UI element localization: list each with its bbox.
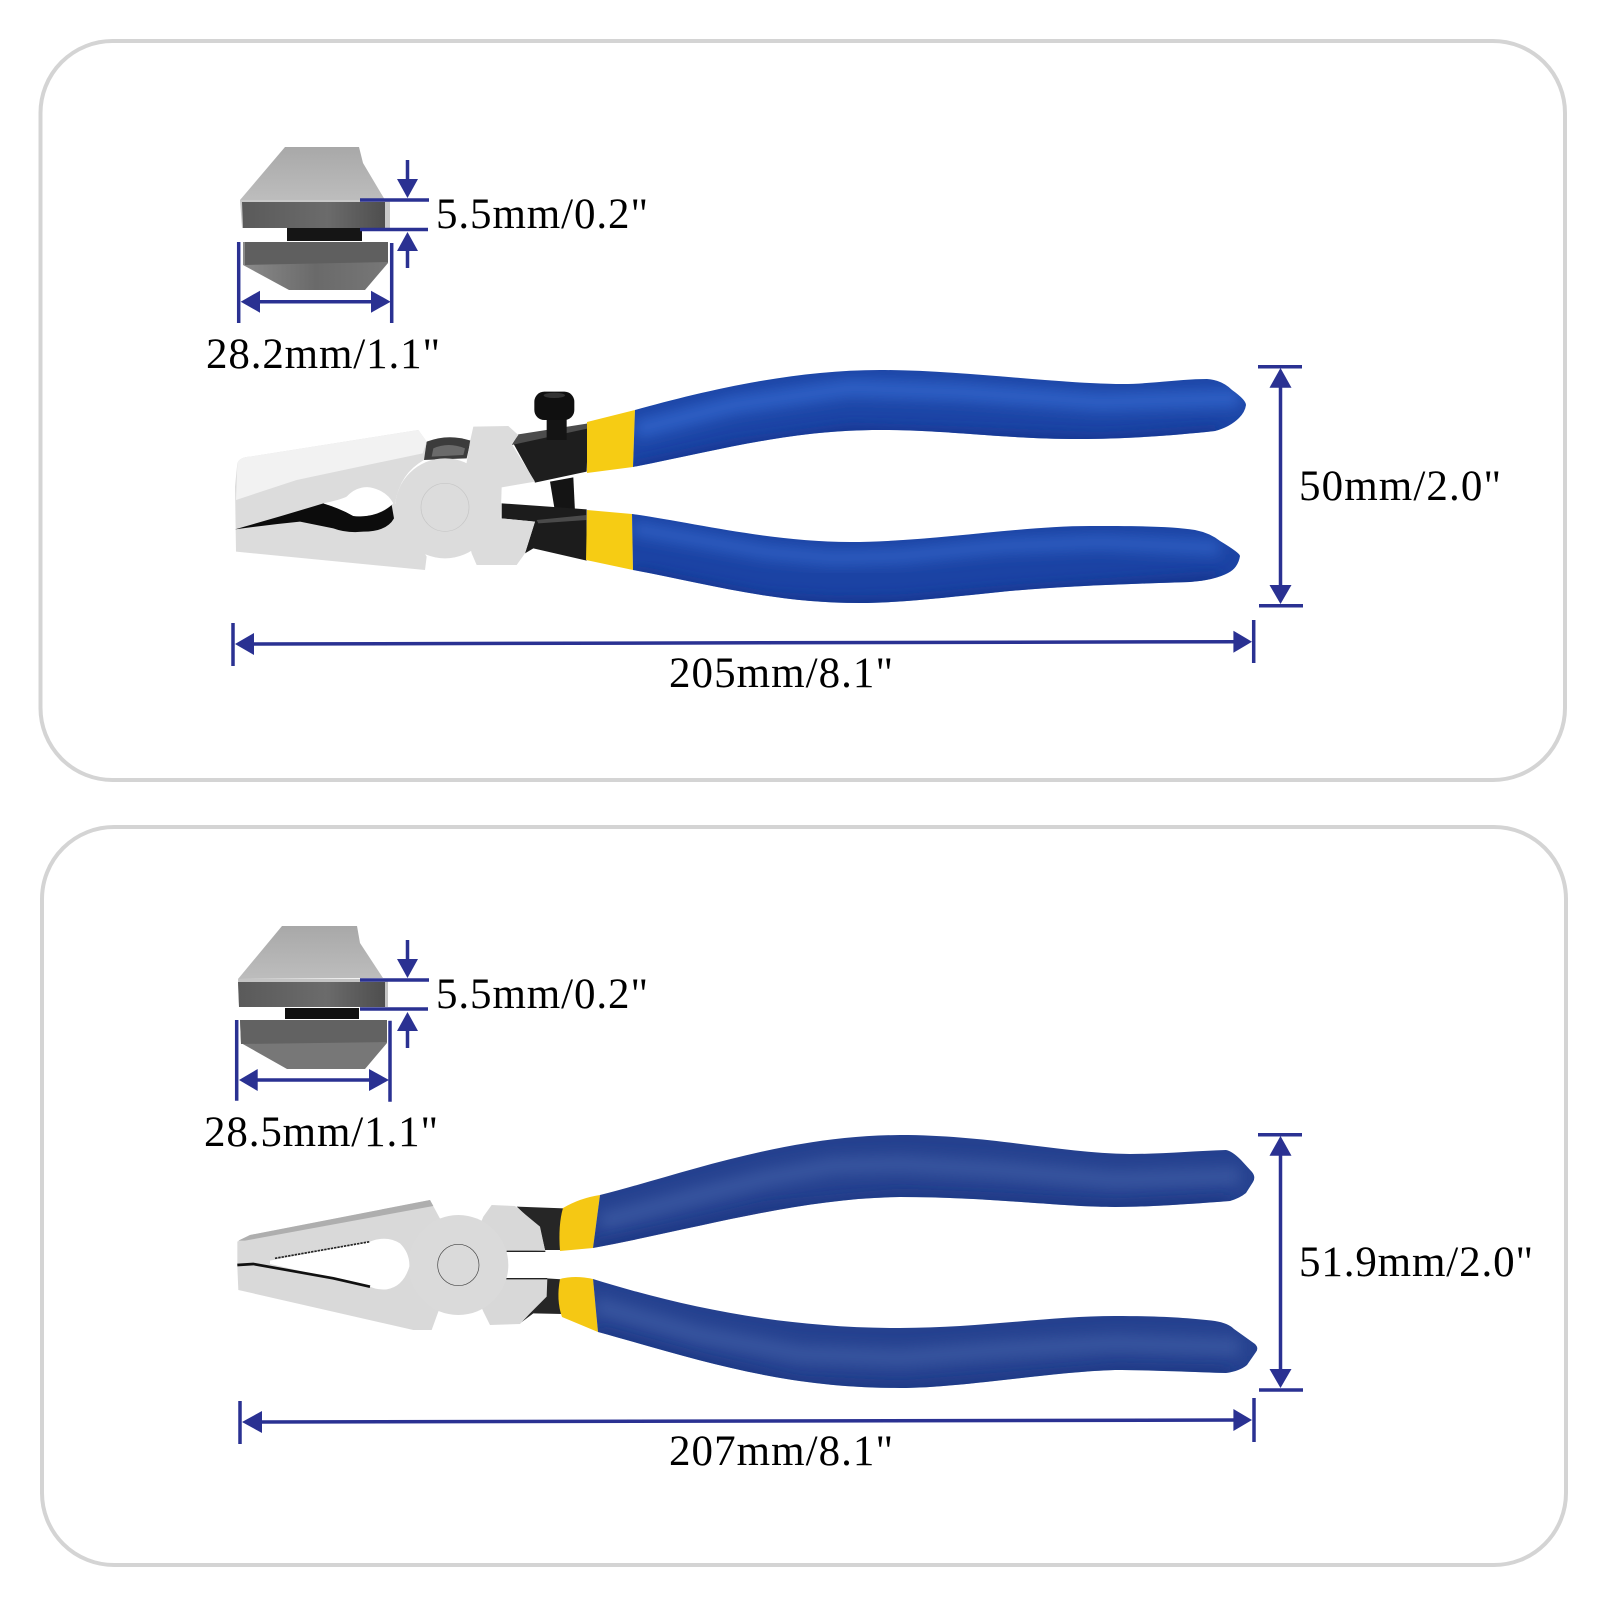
dimension: bottom jaw thickness arrows (360, 940, 429, 1048)
bottom pliers upper handle (593, 1135, 1254, 1248)
icon: top jaw end view (240, 147, 390, 290)
bottom pliers lower sleeve (558, 1277, 598, 1332)
icon: top pliers head (235, 392, 588, 570)
bottom pliers lower handle (593, 1279, 1258, 1388)
top pliers upper handle (633, 370, 1246, 467)
dimension: bottom jaw width arrows (237, 1020, 390, 1102)
top pliers lower sleeve (586, 510, 633, 570)
top pliers (235, 360, 1260, 610)
label: bottom handle spread: 51.9mm/2.0" (1299, 1239, 1533, 1286)
label: bottom overall length: 207mm/8.1" (669, 1428, 893, 1475)
dimension: top jaw width arrows (239, 242, 392, 323)
dimension: top jaw thickness arrows (360, 160, 429, 268)
panel: top pliers frame (40, 41, 1565, 780)
bottom pliers (237, 1125, 1265, 1395)
bottom pliers upper sleeve (559, 1195, 600, 1251)
panel: bottom pliers frame (42, 827, 1566, 1565)
label: top overall length: 205mm/8.1" (669, 650, 893, 697)
top pliers lower handle (632, 514, 1240, 603)
label: bottom jaw thickness: 5.5mm/0.2" (436, 971, 648, 1018)
dimension: top overall length arrows (233, 620, 1254, 666)
label: bottom jaw width: 28.5mm/1.1" (204, 1109, 438, 1156)
dimension: bottom handle spread arrows (1258, 1135, 1303, 1390)
label: top jaw width: 28.2mm/1.1" (206, 331, 440, 378)
dimension: bottom overall length arrows (240, 1398, 1254, 1444)
label: top jaw thickness: 5.5mm/0.2" (436, 191, 648, 238)
top pliers upper sleeve (587, 410, 635, 473)
dimension: top handle spread arrows (1258, 367, 1303, 606)
icon: bottom pliers head (237, 1200, 564, 1330)
label: top handle spread: 50mm/2.0" (1299, 463, 1501, 510)
icon: bottom jaw end view (238, 926, 388, 1069)
